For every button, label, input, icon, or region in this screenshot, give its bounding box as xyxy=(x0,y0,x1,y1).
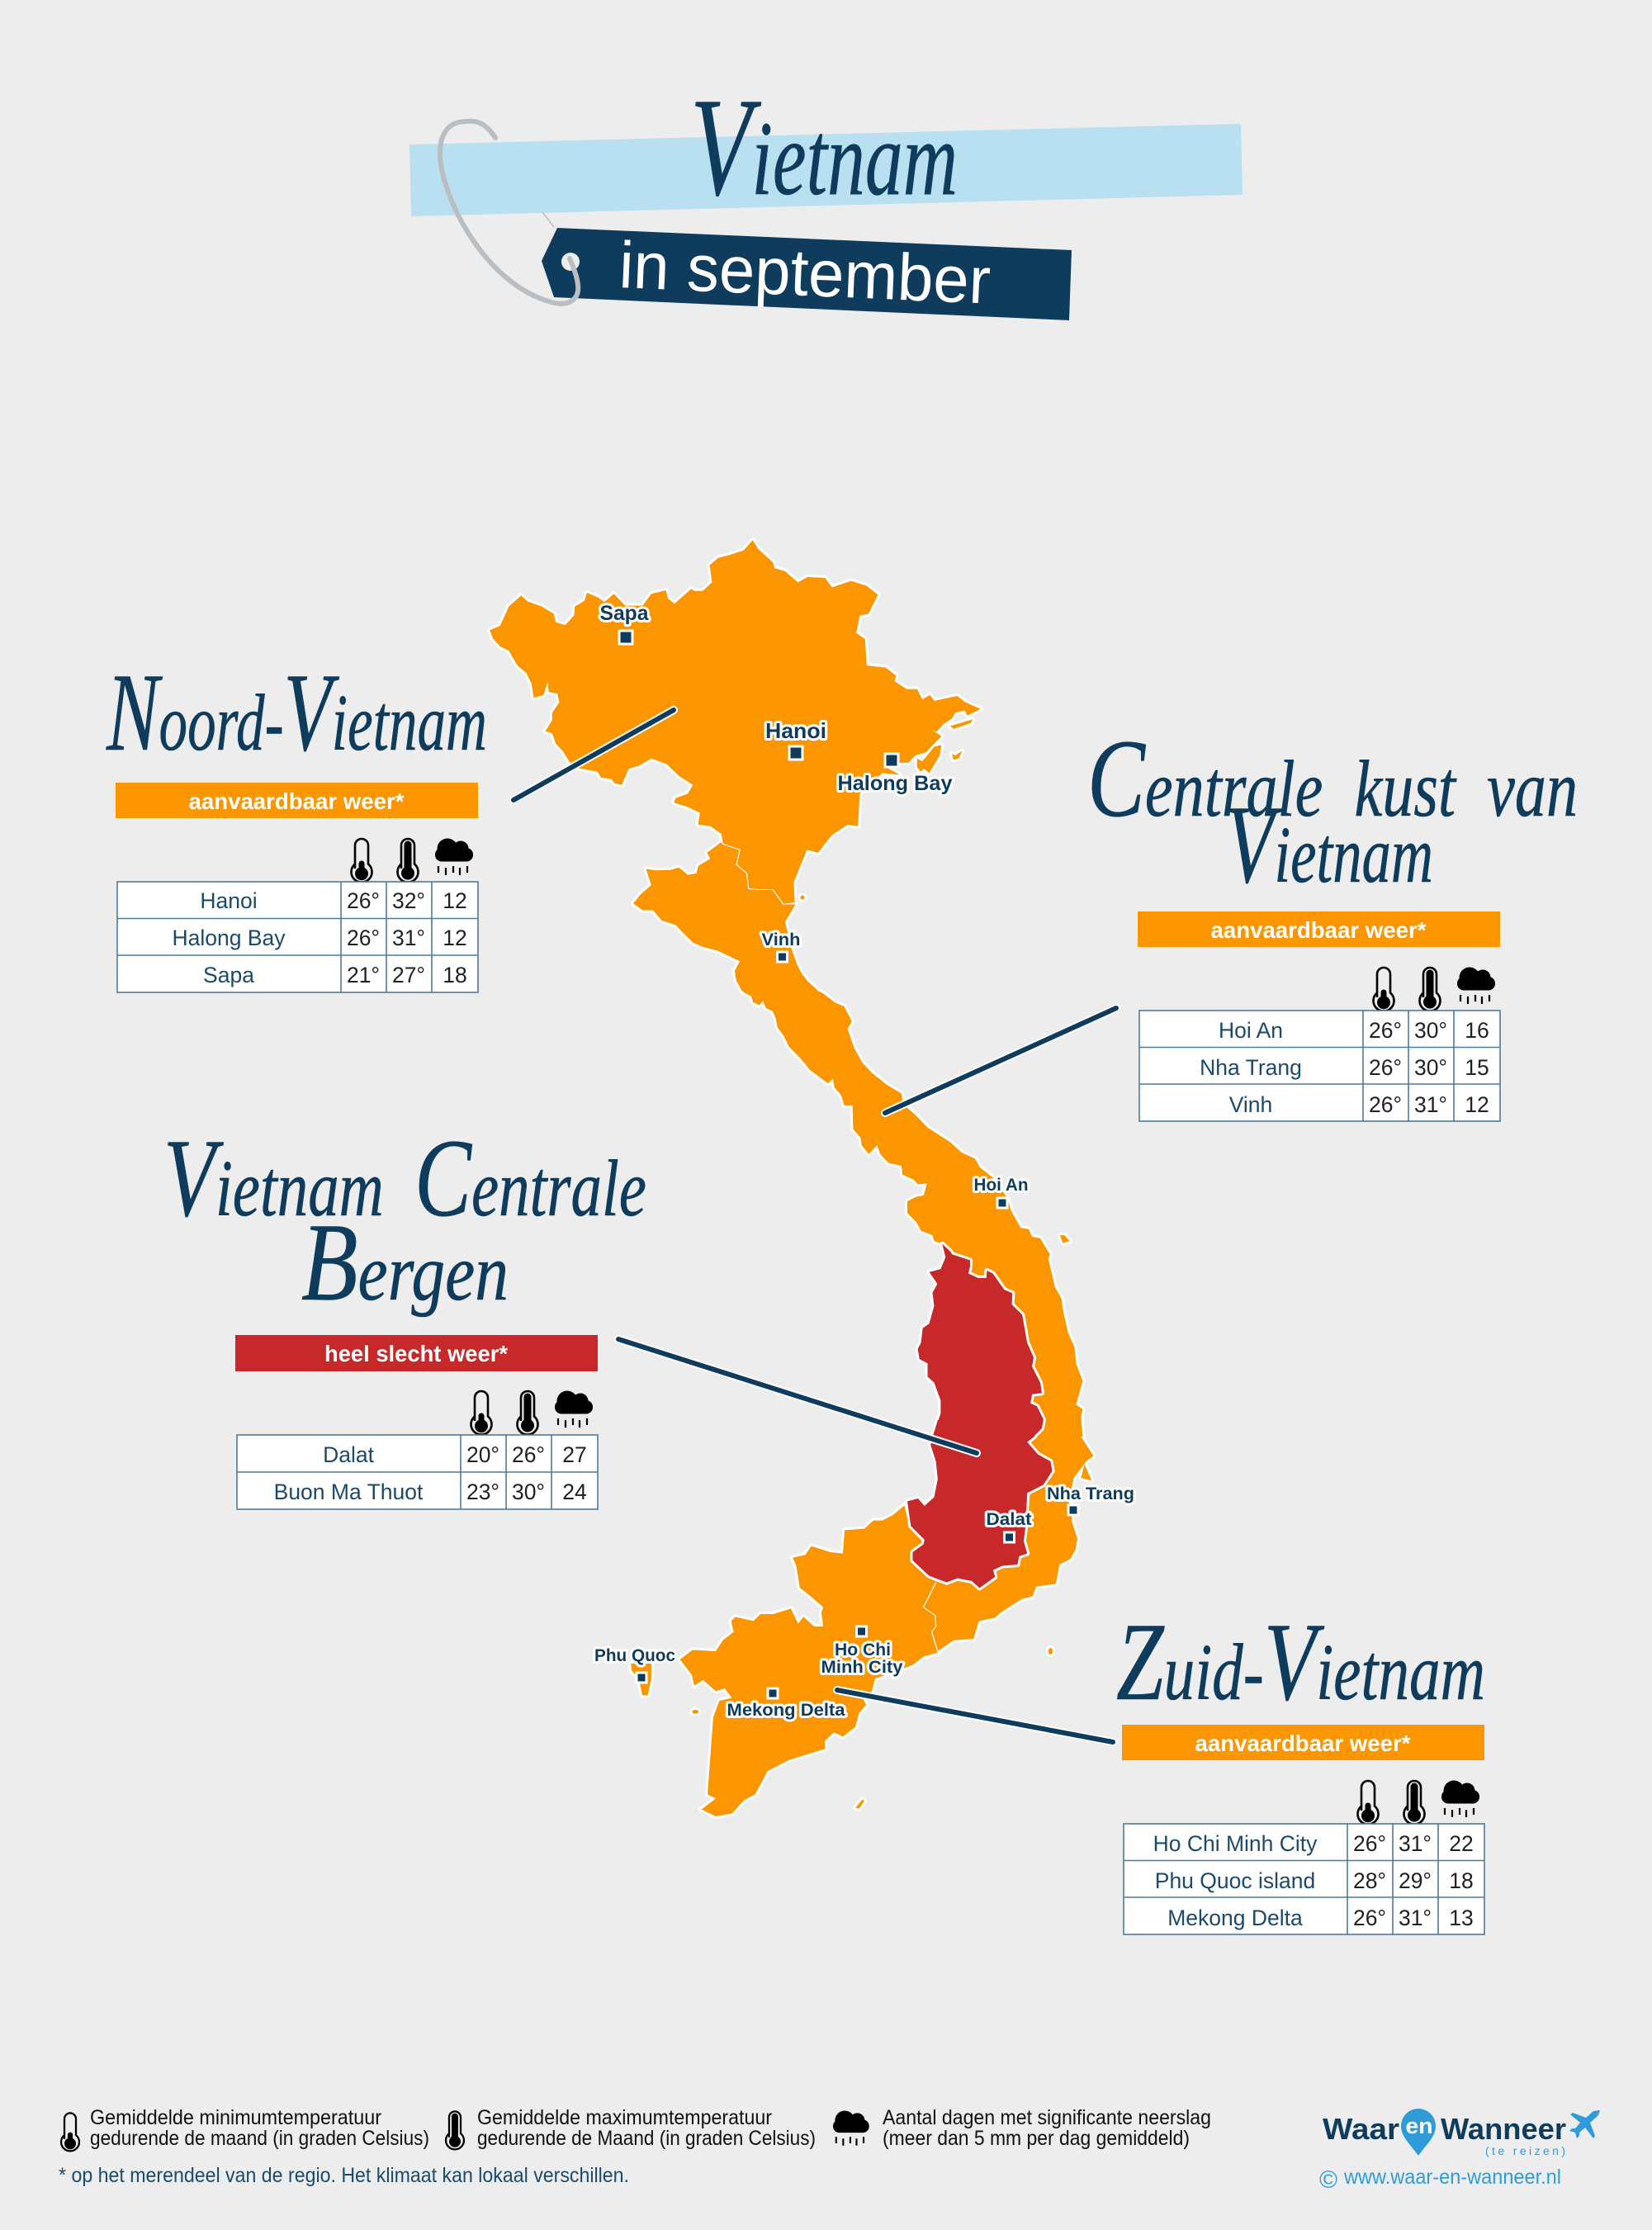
table: 26° xyxy=(512,1442,545,1467)
table: Buon Ma Thuot xyxy=(274,1480,424,1504)
table: 28° xyxy=(1353,1868,1386,1893)
table: 30° xyxy=(1414,1055,1447,1080)
weather bar xyxy=(235,1335,598,1371)
table xyxy=(117,882,478,992)
table xyxy=(1139,1011,1500,1121)
region border: north and central coast xyxy=(721,834,795,904)
city: Hoi An: Hoi An xyxy=(974,1176,1029,1195)
city: Sapa xyxy=(599,602,650,644)
table: 26° xyxy=(1369,1055,1402,1080)
table: 30° xyxy=(1414,1018,1447,1043)
tag hole xyxy=(561,253,580,271)
table: 12 xyxy=(1465,1092,1489,1117)
table: 22 xyxy=(1449,1831,1474,1856)
tagline: (te reizen) xyxy=(1485,2144,1565,2157)
icon: min temperature xyxy=(1357,1781,1379,1825)
icon: min temperature xyxy=(1374,968,1394,1011)
table: 26° xyxy=(1369,1018,1402,1043)
city: Hanoi: Hanoi xyxy=(765,718,826,743)
table: Sapa xyxy=(203,963,254,987)
city: Ho Chi Minh City: Ho Chi xyxy=(835,1641,891,1659)
logo: Waar en Wanneer xyxy=(1319,2109,1600,2194)
legend text: max temperature: Gemiddelde maximumtemperatuur xyxy=(477,2106,772,2129)
subtitle tag xyxy=(542,228,1072,320)
table: 26° xyxy=(1369,1092,1402,1117)
title block xyxy=(409,69,1243,320)
city: Phu Quoc xyxy=(594,1646,675,1683)
weather bar xyxy=(116,783,478,818)
website: www.waar-en-wanneer.nl xyxy=(1343,2166,1561,2189)
weather bar: aanvaardbaar weer* xyxy=(1195,1730,1411,1756)
city: Hoi An xyxy=(974,1176,1029,1208)
legend text: precipitation: (meer dan 5 mm per dag gemiddeld) xyxy=(883,2127,1190,2150)
legend text: min temperature xyxy=(90,2106,429,2150)
table: 31° xyxy=(1399,1831,1432,1856)
table: 15 xyxy=(1465,1055,1489,1080)
heading: Vietnam: Vietnam xyxy=(690,69,958,225)
table: Phu Quoc island xyxy=(1155,1868,1315,1893)
table xyxy=(1124,1824,1484,1934)
legend text: precipitation: Aantal dagen met significante neerslag xyxy=(883,2106,1211,2129)
panel: Noord-Vietnam xyxy=(106,651,487,992)
map of Vietnam xyxy=(490,540,1093,1816)
icon: min temperature xyxy=(352,839,372,883)
central highlands outline xyxy=(907,1244,1053,1588)
footnote: * op het merendeel van de regio. Het klimaat kan lokaal verschillen. xyxy=(59,2164,629,2187)
icon: airplane xyxy=(1569,2110,1600,2138)
wordmark: Wanneer: Wanneer xyxy=(1441,2112,1566,2146)
map regions: orange xyxy=(490,540,1093,1816)
table: Ho Chi Minh City xyxy=(1153,1831,1318,1856)
city: Phu Quoc: Phu Quoc xyxy=(594,1646,675,1665)
heading xyxy=(1087,717,1578,907)
wordmark: Waar: Waar xyxy=(1323,2112,1399,2146)
copyright symbol: © xyxy=(1319,2166,1337,2194)
city: Halong Bay: Halong Bay xyxy=(837,772,953,795)
pin label: en xyxy=(1405,2114,1433,2138)
table: Nha Trang xyxy=(1200,1055,1302,1080)
table: 27° xyxy=(392,963,425,987)
city: Ho Chi Minh City: Minh City xyxy=(821,1658,903,1677)
table: Hoi An xyxy=(1219,1018,1283,1043)
weather bar: aanvaardbaar weer* xyxy=(1210,917,1427,943)
city: Mekong Delta xyxy=(727,1688,845,1720)
table: Hanoi xyxy=(200,888,258,913)
table: 13 xyxy=(1449,1906,1474,1930)
table: 26° xyxy=(347,888,380,913)
table: 30° xyxy=(512,1480,545,1504)
table: 21° xyxy=(347,963,380,987)
subtitle: in september: in september xyxy=(618,228,992,318)
legend text: min temperature: Gemiddelde minimumtemperatuur xyxy=(90,2106,381,2129)
panel: Centrale kust van Vietnam xyxy=(1087,717,1578,1121)
city: Halong Bay xyxy=(837,754,953,795)
city: Vinh: Vinh xyxy=(761,930,801,949)
central highlands region: red xyxy=(907,1244,1053,1588)
table: 16 xyxy=(1465,1018,1489,1043)
table: 26° xyxy=(1353,1906,1386,1930)
panel: Vietnam Centrale Bergen xyxy=(163,1117,646,1509)
icon: location pin xyxy=(1401,2109,1436,2156)
city: Dalat xyxy=(986,1510,1032,1542)
weather bar xyxy=(1138,911,1500,947)
leader line: Centrale Bergen xyxy=(618,1339,977,1453)
table: 31° xyxy=(1399,1906,1432,1930)
heading: Zuid-Vietnam xyxy=(1116,1601,1485,1724)
city: Ho Chi Minh City xyxy=(821,1626,903,1677)
icon: max temperature xyxy=(517,1391,538,1435)
icon: max temperature xyxy=(398,839,418,883)
table xyxy=(237,1435,598,1509)
table: 20° xyxy=(466,1442,499,1467)
icon: min temperature xyxy=(471,1391,492,1435)
icon: max temperature xyxy=(1403,1781,1425,1825)
city: Nha Trang xyxy=(1047,1484,1134,1515)
map outline xyxy=(490,540,1093,1816)
table: Halong Bay xyxy=(172,926,286,950)
title ribbon xyxy=(409,124,1243,216)
leader line: Zuid-Vietnam xyxy=(837,1690,1113,1742)
table: 23° xyxy=(466,1480,499,1504)
table: Vinh xyxy=(1229,1092,1272,1117)
icon: rain cloud xyxy=(1457,968,1495,1004)
legend text: max temperature xyxy=(477,2106,816,2150)
city: Dalat: Dalat xyxy=(986,1510,1032,1529)
table: 31° xyxy=(1414,1092,1447,1117)
weather bar xyxy=(1122,1725,1484,1760)
legend xyxy=(59,2106,1211,2187)
region border: south and central coast xyxy=(923,1583,938,1651)
table: 27 xyxy=(562,1442,587,1467)
heading: Vietnam xyxy=(1225,784,1433,907)
heading: Vietnam Centrale xyxy=(163,1117,646,1240)
table: 26° xyxy=(347,926,380,950)
table: 24 xyxy=(562,1480,587,1504)
tag string xyxy=(542,212,554,227)
table: 18 xyxy=(443,963,467,987)
city: Nha Trang: Nha Trang xyxy=(1047,1484,1134,1503)
icon: rain cloud xyxy=(1441,1780,1479,1817)
table: 26° xyxy=(1353,1831,1386,1856)
city: Sapa: Sapa xyxy=(599,602,650,625)
icon: min temperature xyxy=(61,2113,79,2151)
tag ring xyxy=(440,121,578,304)
leader line: Noord-Vietnam xyxy=(514,710,674,800)
legend text: precipitation xyxy=(883,2106,1211,2150)
icon: rain cloud xyxy=(435,839,473,875)
table: 18 xyxy=(1449,1868,1474,1893)
city: Mekong Delta: Mekong Delta xyxy=(727,1701,845,1720)
city: Vinh xyxy=(761,930,801,962)
table: 31° xyxy=(392,926,425,950)
legend text: min temperature: gedurende de maand (in graden Celsius) xyxy=(90,2127,429,2150)
panel: Zuid-Vietnam xyxy=(1116,1601,1485,1934)
heading: Bergen xyxy=(301,1201,509,1324)
table: 29° xyxy=(1399,1868,1432,1893)
weather bar: heel slecht weer* xyxy=(324,1341,508,1366)
icon: max temperature xyxy=(1420,968,1440,1011)
table: 12 xyxy=(443,888,467,913)
icon: rain cloud xyxy=(833,2110,869,2146)
heading: Noord-Vietnam xyxy=(106,651,487,774)
table: 12 xyxy=(443,926,467,950)
legend text: max temperature: gedurende de Maand (in graden Celsius) xyxy=(477,2127,816,2150)
icon: rain cloud xyxy=(555,1390,593,1427)
heading xyxy=(163,1117,646,1324)
weather bar: aanvaardbaar weer* xyxy=(188,788,405,814)
leader line: Centrale kust xyxy=(885,1008,1116,1113)
city: Hanoi xyxy=(765,718,826,760)
table: 32° xyxy=(392,888,425,913)
icon: max temperature xyxy=(446,2111,464,2149)
table: Dalat xyxy=(323,1442,375,1467)
table: Mekong Delta xyxy=(1167,1906,1303,1930)
